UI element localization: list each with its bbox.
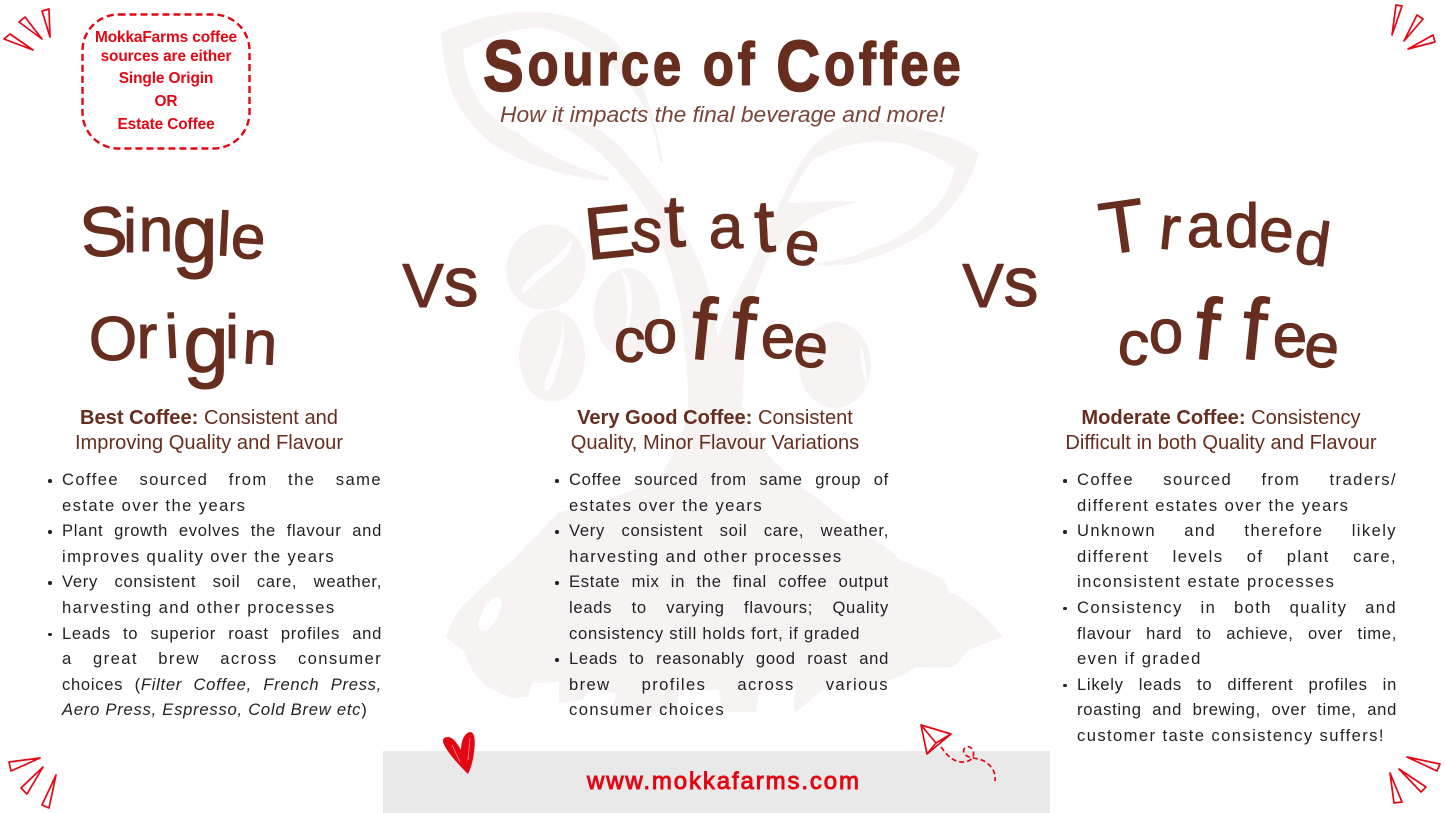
bullet list: single origin: Coffee sourced from the same	[62, 470, 382, 489]
bullet list: traded coffee: Unknown and therefore likely	[1077, 521, 1397, 540]
bullet list: estate coffee: consumer choices	[569, 700, 725, 719]
subheading: estate coffee: Quality, Minor Flavour Variations	[571, 432, 859, 454]
bullet list: estate coffee: Estate mix in the final coffee output	[569, 572, 889, 591]
bullet list: traded coffee: flavour hard to achieve, over time,	[1077, 624, 1397, 643]
bullet list: estate coffee: Very consistent soil care, weather,	[569, 521, 889, 540]
heading: single origin: Origin	[89, 299, 279, 390]
subheading: estate coffee	[571, 407, 859, 454]
heading: traded coffee	[1094, 182, 1343, 383]
bullet list: traded coffee: even if graded	[1077, 649, 1202, 668]
text: MokkaFarms coffee	[95, 29, 237, 46]
bullet list: traded coffee: roasting and brewing, over time, and	[1077, 700, 1397, 719]
icon: burst bottom-right	[1390, 757, 1440, 803]
bullet list: single origin: harvesting and other processes	[62, 598, 336, 617]
heading: traded coffee: coffee	[1115, 278, 1343, 383]
subheading: traded coffee	[1065, 407, 1377, 454]
bullet list: single origin: Aero Press, Espresso, Cold Brew etc)	[62, 700, 368, 719]
bullet list: traded coffee: different levels of plant care,	[1077, 547, 1397, 566]
title	[483, 27, 961, 107]
text: OR	[155, 93, 177, 110]
dashed callout border	[82, 14, 250, 148]
heading: single origin: Single	[76, 189, 268, 280]
callout: source note	[95, 29, 237, 133]
white patch behind footer	[383, 714, 1050, 751]
title: ource of	[528, 31, 772, 98]
bullet list: single origin: improves quality over the years	[62, 547, 335, 566]
subheading: traded coffee: Moderate Coffee: Consistency	[1081, 407, 1361, 429]
subheading: single origin	[75, 407, 343, 454]
bullet list: estate coffee: leads to varying flavours; Quality	[569, 598, 889, 617]
heading: single origin	[76, 189, 279, 390]
footer banner	[383, 751, 1050, 813]
bullet list: traded coffee: different estates over the years	[1077, 496, 1349, 515]
heading: estate coffee: coffee	[611, 278, 832, 383]
bullet list: single origin: choices (Filter Coffee, French Press,	[62, 675, 382, 694]
bullet list: single origin: Leads to superior roast profiles and	[62, 624, 382, 643]
bullet list: single origin	[48, 470, 382, 719]
heading: traded coffee: Traded	[1094, 182, 1335, 281]
title: offee	[824, 31, 961, 98]
bullet list: single origin: Plant growth evolves the flavour and	[62, 521, 382, 540]
bullet list: single origin: Very consistent soil care, weather,	[62, 572, 382, 591]
title: S	[483, 27, 524, 107]
bullet list: estate coffee: harvesting and other processes	[569, 547, 843, 566]
bullet list: estate coffee: Coffee sourced from same group of	[569, 470, 889, 489]
icon: burst bottom-left	[9, 758, 56, 808]
icon: heart	[443, 732, 475, 774]
text: Single Origin	[119, 70, 213, 87]
title: C	[776, 27, 820, 107]
icon: paper airplane with dashed trail	[921, 725, 995, 781]
bullet list: traded coffee: customer taste consistency suffers!	[1077, 726, 1385, 745]
bullet list: estate coffee: Leads to reasonably good roast and	[569, 649, 889, 668]
subheading: traded coffee: Difficult in both Quality and Flavour	[1065, 432, 1377, 454]
icon: burst top-right	[1392, 5, 1435, 49]
heading: estate coffee: Est ate	[580, 179, 825, 281]
bullet list: estate coffee: consistency still holds fort, if graded	[569, 624, 860, 643]
subheading: estate coffee: Very Good Coffee: Consistent	[577, 407, 853, 429]
vs: first: Vs	[402, 243, 478, 321]
bullet list: estate coffee: brew profiles across various	[569, 675, 889, 694]
bullet list: estate coffee: estates over the years	[569, 496, 763, 515]
bullet list: single origin: estate over the years	[62, 496, 246, 515]
bullet list: estate coffee	[555, 470, 889, 719]
heading: estate coffee	[580, 179, 832, 383]
bullet list: traded coffee: Consistency in both quality and	[1077, 598, 1397, 617]
bullet list: single origin: a great brew across consumer	[62, 649, 382, 668]
bullet list: traded coffee: Coffee sourced from traders/	[1077, 470, 1397, 489]
vs: second: Vs	[962, 243, 1038, 321]
subheading: single origin: Best Coffee: Consistent and	[80, 407, 338, 429]
text: Estate Coffee	[117, 116, 215, 133]
subheading: single origin: Improving Quality and Flavour	[75, 432, 343, 454]
bullet list: traded coffee: inconsistent estate processes	[1077, 572, 1335, 591]
icon: burst top-left	[4, 9, 50, 50]
subtitle: How it impacts the final beverage and more!	[500, 102, 946, 127]
text: sources are either	[101, 48, 231, 65]
bullet list: traded coffee: Likely leads to different profiles in	[1077, 675, 1397, 694]
website url: www.mokkafarms.com	[586, 768, 859, 795]
bullet list: traded coffee	[1063, 470, 1397, 745]
